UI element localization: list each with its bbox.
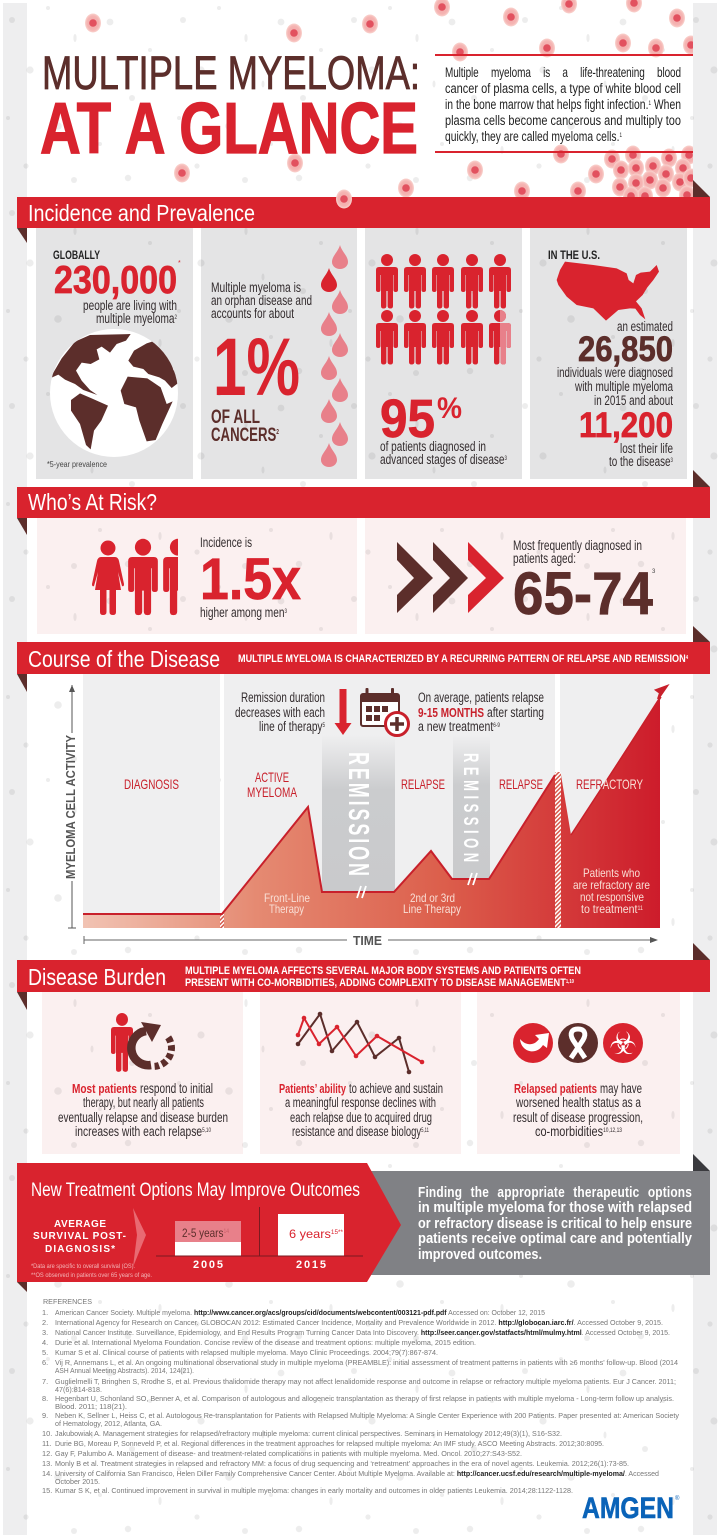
survival label: AVERAGE [54, 1219, 106, 1230]
panel: in the U.S.: to the disease [609, 454, 693, 469]
panel: orphan disease [211, 245, 348, 467]
references: 2. [42, 1318, 48, 1327]
panel: key message: improved outcomes. [418, 1247, 542, 1263]
survival label [33, 1219, 126, 1255]
panel: orphan disease: accounts for about [211, 306, 294, 321]
icon: relapse arrow [513, 1023, 553, 1063]
panel: relapsed patients: may have [600, 1081, 642, 1096]
bar chart: survival: 2015 [296, 1259, 326, 1271]
callout: relapse timing: On average, patients relapse [418, 690, 544, 705]
references: Neben K, Sellner L, Heiss C, et al. Autologous Re-transplantation for Patients with Relapsed Multiple Myeloma: A Single Center Experience with 200 Patients. Paper presented at: American Society [55, 1411, 679, 1420]
intro text block [435, 54, 693, 153]
panel: globally: *5-year prevalence [47, 459, 107, 469]
panel: most patients: therapy, but nearly all patients [83, 1095, 204, 1110]
panel: advanced stages: advanced stages of disease [380, 452, 547, 467]
references: American Cancer Society. Multiple myeloma. http://www.cancer.org/acs/groups/cid/documents/webcontent/003121-pdf.pdf Accessed on: October 12, 2015 [55, 1308, 545, 1317]
phase labels: ACTIVE [255, 769, 289, 785]
panel: most patients: 5,10 [202, 1128, 211, 1134]
banner: disease burden: MULTIPLE MYELOMA AFFECTS SEVERAL MAJOR BODY SYSTEMS AND PATIENTS OFTEN [185, 965, 581, 977]
panel: incidence among men: 1.5x [200, 547, 301, 612]
panel: patients' ability: each relapse due to acquired drug [290, 1110, 432, 1125]
panel: patients' ability: a meaningful response declines with [285, 1095, 436, 1110]
banner: course of the disease: 4 [686, 655, 688, 661]
phase labels [124, 769, 650, 916]
references: 5. [42, 1348, 48, 1357]
references: 8. [42, 1394, 48, 1403]
panel: most patients: eventually relapse and disease burden [58, 1110, 228, 1125]
panel: in the U.S.: 11,200 [579, 406, 673, 445]
phase labels: REFRACTORY [576, 776, 643, 792]
remission bands [322, 735, 490, 892]
references: Durie et al. International Myeloma Foundation. Concise review of the disease and treatment options: multiple myeloma, 2015 edition. [55, 1338, 476, 1347]
survival label: DIAGNOSIS* [45, 1244, 115, 1255]
panel: globally: * [178, 260, 181, 267]
references: University of California San Francisco, Helen Diller Family Comprehensive Cancer Center. About Multiple Myeloma. Available at: http://cancer.ucsf.edu/research/multiple-myeloma/. Accessed [55, 1469, 659, 1478]
logo: Amgen: AMGEN [582, 1492, 674, 1525]
banner: incidence and prevalence: Incidence and Prevalence [28, 200, 255, 226]
intro text block: quickly, they are called myeloma cells. [445, 129, 674, 144]
references: ASH Annual Meeting Abstracts). 2014, 124(21). [55, 1366, 194, 1375]
phase labels: RELAPSE [401, 776, 445, 792]
icon: globe [50, 329, 179, 457]
logo: Amgen: ® [675, 1495, 680, 1502]
references: Gay F, Palumbo A. Management of disease- and treatment-related complications in patients with multiple myeloma. Med. Oncol. 2010;27:S43-S52. [55, 1449, 522, 1458]
panel: advanced stages: of patients diagnosed in [380, 439, 486, 454]
panel: globally: people are living with [83, 298, 177, 313]
panel: key message: in multiple myeloma for those with relapsed [418, 1200, 692, 1216]
y axis [64, 685, 78, 928]
phase labels: 2nd or 3rd [410, 891, 455, 905]
phase labels: 11 [637, 906, 644, 912]
panel: most patients: Most patients [72, 1081, 137, 1096]
x axis [84, 934, 658, 948]
panel: incidence among men: higher among men [200, 605, 313, 620]
banner: disease burden: 1,10 [566, 979, 574, 985]
panel: patients' ability [279, 1012, 443, 1139]
references: Jakubowiak A. Management strategies for relapsed/refractory multiple myeloma: current clinical perspectives. Seminars in Hematology 2012;49(3)(1), S16-S32. [55, 1429, 562, 1438]
panel: orphan disease: OF ALL [211, 407, 260, 428]
phase labels: MYELOMA [247, 784, 297, 800]
title: MULTIPLE MYELOMA: [42, 47, 420, 100]
chart: course of the disease [64, 674, 667, 948]
references: 47(6):814-818. [55, 1385, 102, 1394]
panel: relapsed patients: 10,12,13 [603, 1128, 623, 1134]
bar chart: survival [156, 1207, 363, 1271]
bar chart: survival: 14 [223, 1229, 230, 1235]
footnotes: *Data are specific to overall survival (OS). [31, 1263, 135, 1270]
panel: advanced stages: % [437, 392, 462, 425]
intro text block: When [651, 97, 681, 112]
icon: biohazard: ☣ [609, 1026, 637, 1062]
banner: course of the disease [17, 626, 710, 692]
callout: remission duration: line of therapy [259, 719, 344, 734]
panel: advanced stages: 3 [505, 456, 507, 462]
bar chart: survival: 2005 [193, 1259, 223, 1271]
panel: relapsed patients: co-morbidities [535, 1124, 619, 1139]
phase labels: RELAPSE [499, 776, 543, 792]
survival label: SURVIVAL POST- [33, 1231, 126, 1242]
panel: globally: multiple myeloma [96, 311, 201, 326]
panel: in the U.S.: with multiple myeloma [574, 379, 673, 394]
references: Kumar S et al. Clinical course of patients with relapsed multiple myeloma. Mayo Clinic Proceedings. 2004;79(7):867-874. [55, 1348, 438, 1357]
references [42, 1297, 679, 1495]
panel: advanced stages [376, 254, 511, 467]
icon: people grid [376, 254, 511, 364]
icon: chevrons [397, 542, 504, 613]
panel: age most diagnosed: 3 [652, 569, 656, 575]
references: Guglielmelli T, Bringhen S, Rrodhe S, et al. Previous thalidomide therapy may not affect lenalidomide response and outcome in relapse or refractory multiple myeloma patients. Eur J Cancer. 2011; [55, 1377, 676, 1386]
panel: in the U.S.: individuals were diagnosed [557, 365, 673, 380]
arrow: remission decreases [334, 689, 352, 735]
panel: patients' ability: Patients’ ability [279, 1081, 347, 1096]
panel: patients' ability: 5,11 [421, 1128, 429, 1134]
title [40, 47, 420, 169]
references: 13. [42, 1459, 52, 1468]
panel: most patients [58, 1013, 228, 1139]
phase labels: to treatment [581, 902, 645, 916]
intro text block: in the bone marrow that helps fight infection. [445, 97, 710, 112]
references: of Hematology, 2012, Atlanta, GA. [55, 1419, 162, 1428]
panel: orphan disease: an orphan disease and [211, 293, 312, 308]
icon: woman and men [92, 538, 178, 616]
panel: relapsed patients: worsened health status as a [515, 1095, 641, 1110]
references: 14. [42, 1469, 52, 1478]
panel: in the U.S.: lost their life [620, 441, 673, 456]
references: 12. [42, 1449, 52, 1458]
references: Vij R, Annemans L, et al. An ongoing multinational observational study in multiple myeloma (PREAMBLE): initial assessment of treatment patterns in patients with ≥6 months’ follow-up. Blood (2014 [55, 1358, 678, 1367]
callout: remission duration [235, 690, 325, 734]
references: 15. [42, 1486, 52, 1495]
footnotes [31, 1263, 152, 1279]
references: National Cancer Institute. Surveillance, Epidemiology, and End Results Program Turning Cancer Data Into Discovery. http://seer.cancer.gov/statfacts/html/mulmy.html. Accessed October 9, 2015. [55, 1328, 670, 1337]
callout: relapse timing: after starting [487, 705, 544, 720]
footnotes: **OS observed in patients over 65 years of age. [31, 1272, 152, 1279]
panel: in the U.S. [548, 250, 673, 469]
references: Monly B et al. Treatment strategies in relapsed and refractory MM: a focus of drug sequencing and ‘retreatment’ approaches in the era of novel agents. Leukemia. 2012;26(1):73-85. [55, 1459, 629, 1468]
panel: key message: Finding the appropriate therapeutic options [418, 1184, 692, 1200]
references: 3. [42, 1328, 48, 1337]
panel backgrounds [36, 228, 687, 1154]
banner: incidence and prevalence [17, 180, 710, 243]
panel: in the U.S.: 3 [671, 458, 673, 464]
panel: relapsed patients [513, 1023, 643, 1139]
banner: course of the disease: Course of the Disease [28, 646, 220, 672]
references: 6. [42, 1358, 48, 1367]
panel: relapsed patients: result of disease progression, [513, 1110, 643, 1125]
references: REFERENCES [43, 1297, 92, 1306]
icon: declining zigzag lines [296, 1012, 424, 1074]
panel: advanced stages: 95 [380, 389, 435, 449]
phase labels: Therapy [269, 902, 304, 916]
icon: US map [557, 262, 659, 321]
panel: globally: GLOBALLY [53, 250, 100, 262]
references: Blood. 2011; 118(21). [55, 1402, 127, 1411]
panel: incidence among men [92, 535, 301, 620]
blood cells [85, 0, 699, 206]
intro text block: 1 [648, 101, 652, 107]
references: 4. [42, 1338, 48, 1347]
references: International Agency for Research on Cancer. GLOBOCAN 2012: Estimated Cancer Incidence, Mortality and Prevalence Worldwide in 2012. http://globocan.iarc.fr/. Accessed October 9, 2015. [55, 1318, 663, 1327]
bar chart: survival: 6 years [289, 1227, 328, 1241]
callout: relapse timing: a new treatment [418, 719, 515, 734]
panel: key message [360, 1154, 710, 1275]
callout: remission duration: 5 [322, 723, 325, 729]
phase labels: not responsive [580, 890, 644, 904]
panel: in the U.S.: an estimated [617, 319, 673, 334]
banner: who's at risk [17, 470, 710, 535]
references: 11. [42, 1439, 52, 1448]
panel: key message: patients receive optimal care and potentially [418, 1231, 692, 1247]
panel: in the U.S.: 26,850 [578, 330, 673, 369]
banner: disease burden: PRESENT WITH CO-MORBIDITIES, ADDING COMPLEXITY TO DISEASE MANAGEMENT [185, 977, 640, 989]
references: 10. [42, 1429, 52, 1438]
panel: most patients: increases with each relapse [75, 1124, 242, 1139]
callout: remission duration: Remission duration [241, 690, 325, 705]
panel: orphan disease: CANCERS [211, 425, 305, 446]
phase labels: are refractory are [573, 878, 650, 892]
panel: globally [47, 250, 181, 469]
panel: incidence among men: 3 [284, 609, 287, 615]
panel: globally: 2 [175, 315, 177, 321]
panel: globally: 230,000 [54, 259, 177, 302]
phase labels: Patients who [583, 866, 640, 880]
references: 7. [42, 1377, 48, 1386]
panel: age most diagnosed: 65-74 [513, 560, 654, 627]
remission bands: REMISSION [459, 753, 483, 862]
panel: incidence among men: Incidence is [200, 535, 252, 550]
bar chart: survival: 15** [331, 1230, 344, 1236]
panel: orphan disease: 2 [276, 429, 279, 436]
intro text block: Multiple myeloma is a life-threatening blood [445, 64, 681, 80]
banner: who's at risk: Who’s At Risk? [28, 489, 157, 515]
panel: orphan disease: 1% [213, 322, 300, 413]
panel: relapsed patients: Relapsed patients [514, 1081, 597, 1096]
phase labels: DIAGNOSIS [124, 776, 179, 792]
panel: in the U.S.: IN THE U.S. [548, 250, 600, 262]
callout: relapse timing [418, 690, 544, 734]
references: Hegenbart U, Schonland SO, Benner A, et al. Comparison of autologous and allogeneic transplantation as therapy of first relapse in patients with multiple myeloma - Long-term follow up analysis. [55, 1394, 674, 1403]
panel: orphan disease: Multiple myeloma is [211, 280, 301, 295]
x axis: TIME [353, 934, 382, 948]
panel: age most diagnosed [397, 538, 656, 627]
phase labels: Line Therapy [403, 902, 461, 916]
panel: most patients: respond to initial [140, 1081, 213, 1096]
y axis: MYELOMA CELL ACTIVITY [64, 734, 78, 879]
references: Kumar S K, et al. Continued improvement in survival in multiple myeloma: changes in early mortality and outcomes in older patients Leukemia. 2014;28:1122-1128. [55, 1486, 573, 1495]
panel: new treatment options: New Treatment Options May Improve Outcomes [31, 1180, 360, 1201]
icon: blood drops [321, 245, 348, 467]
area curve [83, 686, 667, 928]
callout: remission duration: decreases with each [235, 705, 325, 720]
panel: age most diagnosed: Most frequently diagnosed in [513, 538, 642, 553]
references: 9. [42, 1411, 48, 1420]
intro text block: 1 [619, 133, 623, 139]
panel: new treatment options [17, 1163, 401, 1292]
callout: relapse timing: 9-15 MONTHS [418, 705, 484, 720]
references: Durie BG, Moreau P, Sonneveld P, et al. Regional differences in the treatment approaches for relapsed multiple myeloma: An IMF study. ASCO Meeting Abstracts. 2012;30:8095. [55, 1439, 604, 1448]
icon: ribbon [558, 1023, 598, 1063]
panel: patients' ability: to achieve and sustain [349, 1081, 443, 1096]
bar chart: survival: 2-5 years [182, 1226, 232, 1240]
panel: patients' ability: resistance and disease biology [292, 1124, 477, 1139]
references: October 2015. [55, 1477, 100, 1486]
panel: in the U.S.: in 2015 and about [594, 393, 673, 408]
references: 1. [42, 1308, 48, 1317]
panel: age most diagnosed: patients aged: [513, 551, 576, 566]
icon: person with cycle arrow [111, 1013, 172, 1072]
banner: disease burden: Disease Burden [28, 964, 166, 990]
title: AT A GLANCE [40, 89, 418, 169]
remission bands: REMISSION [342, 752, 374, 876]
banner: disease burden [17, 943, 710, 1010]
phase labels: Front-Line [264, 891, 310, 905]
icon: calendar [361, 688, 408, 736]
callout: relapse timing: 6-9 [493, 723, 501, 729]
